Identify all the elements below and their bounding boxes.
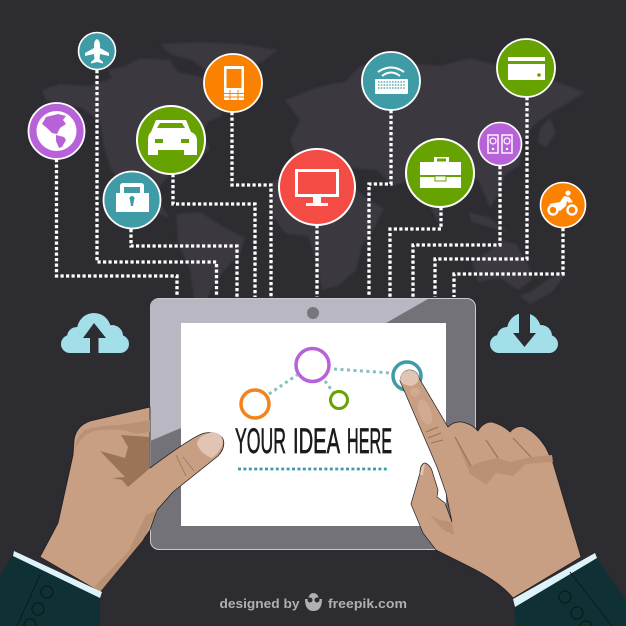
node: purple <box>296 348 329 382</box>
tablet screen <box>181 323 446 526</box>
line: phone <box>232 112 271 297</box>
headline: IDEA <box>293 422 340 461</box>
node: teal <box>393 362 421 390</box>
headline: YOUR <box>235 422 286 461</box>
headline <box>235 422 392 461</box>
icon: speakers <box>478 122 522 166</box>
credit text right: freepik.com <box>328 596 407 611</box>
right cuff and sleeve <box>513 553 626 626</box>
icon: phone <box>204 54 262 112</box>
diagram links <box>269 369 391 394</box>
icon: plane <box>78 32 116 70</box>
icon: globe <box>28 103 84 159</box>
line: lock <box>131 229 237 297</box>
icon: car <box>137 106 205 174</box>
icon: keyboard <box>362 52 420 110</box>
connector lines <box>56 70 563 297</box>
right hand <box>400 370 581 598</box>
line: monitor <box>315 225 319 297</box>
credit logo <box>305 593 322 611</box>
icon: monitor <box>279 149 355 225</box>
node: orange <box>241 390 269 418</box>
line: bike <box>454 228 563 297</box>
line: plane <box>97 70 216 297</box>
line: keyboard <box>369 110 391 297</box>
icon: briefcase <box>406 139 474 207</box>
headline dotted rule <box>238 468 388 470</box>
icon: upload cloud <box>61 313 129 354</box>
icon: card <box>497 39 555 97</box>
credit text left: designed by <box>220 596 300 611</box>
node: green <box>330 392 348 408</box>
tablet camera <box>307 307 319 319</box>
tablet <box>150 298 476 550</box>
icon: download cloud <box>490 313 558 353</box>
line: briefcase <box>390 207 441 297</box>
line: globe <box>56 159 177 297</box>
line: car <box>173 174 255 297</box>
left hand <box>40 407 224 592</box>
tablet: HERE <box>347 422 392 461</box>
icon: lock <box>104 172 160 228</box>
line: card <box>435 97 527 297</box>
icon: motorbike <box>540 182 586 228</box>
footer credit <box>220 593 407 611</box>
world map <box>42 42 585 306</box>
left cuff and sleeve <box>0 551 102 626</box>
line: speaker <box>413 166 500 297</box>
